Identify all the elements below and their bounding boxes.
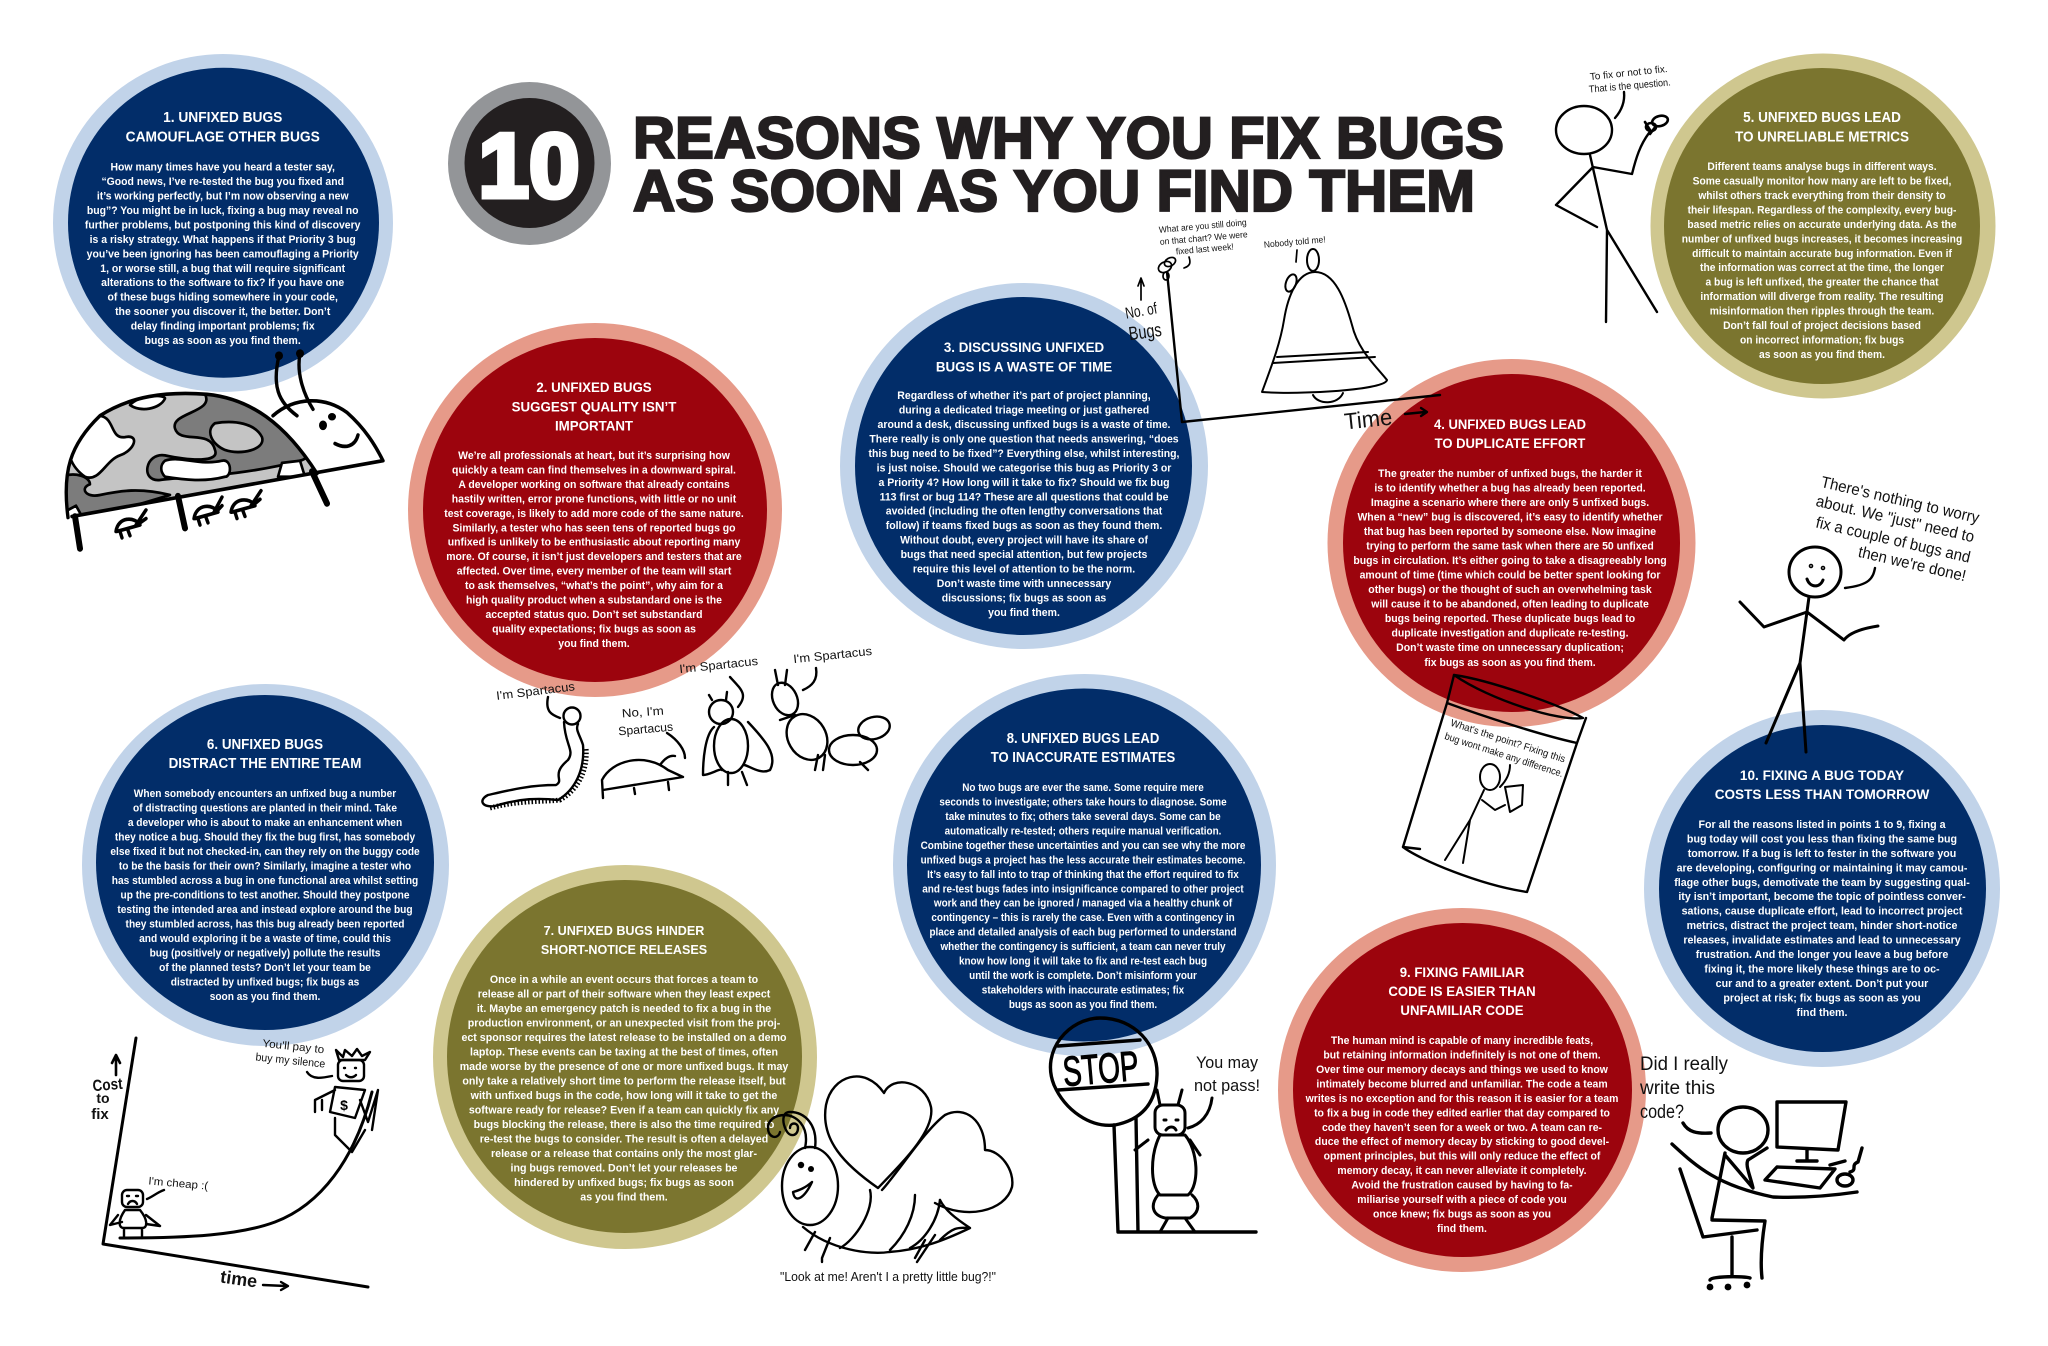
text 1: further problems, but postponing this kind of discovery [85, 219, 360, 232]
axis label: Cost to fix: fix [91, 1106, 109, 1123]
text 2: you find them. [558, 638, 630, 650]
axis label: time: time [219, 1267, 259, 1292]
text 7: Once in a while an event occurs that forces a team to [490, 974, 759, 986]
panel 3: waste of time [840, 283, 1208, 649]
text 2: test coverage, is likely to add more code of the same nature. [444, 508, 744, 520]
heading 6: 6. UNFIXED BUGS [207, 736, 323, 752]
icon: small stick figure with jar [1445, 764, 1523, 863]
caption: I'm Spartacus 2: I'm Spartacus [679, 654, 759, 676]
illustration: camouflage bug [60, 349, 383, 549]
text 8: know how long it will take to fix and re-test each bug [959, 956, 1207, 968]
illustration: stop sign bug: not pass! [1194, 1076, 1260, 1095]
text 5: Different teams analyse bugs in different ways. [1707, 161, 1937, 173]
heading 7: 7. UNFIXED BUGS HINDER [544, 923, 704, 938]
text 4: that bug has been reported by someone else. Now imagine [1364, 526, 1656, 538]
text 3: avoided (including the often lengthy conversations that [886, 506, 1163, 518]
text 9: once knew; fix bugs as soon as you [1373, 1208, 1551, 1221]
text 10: project at risk; fix bugs as soon as you [1723, 992, 1921, 1004]
caption: No, I'm Spartacus: No, I'm [621, 704, 664, 720]
panel 7: short-notice releases [433, 865, 817, 1249]
text 9: duce the effect of memory decay by sticking to good devel- [1315, 1136, 1609, 1148]
text 2: We’re all professionals at heart, but it’s surprising how [458, 450, 730, 462]
panel 1: camouflage [53, 54, 393, 392]
text 1: of these bugs hiding somewhere in your code, [108, 291, 338, 304]
panel 8: inaccurate estimates [893, 674, 1276, 1056]
caption: I'm cheap: I'm cheap :( [148, 1175, 209, 1193]
icon: caterpillar [482, 697, 586, 808]
text 4: bugs in circulation. It’s either going to take a disagreeably long [1353, 555, 1667, 567]
text 7: ect sponsor requires the latest release to be installed on a demo [461, 1032, 787, 1044]
illustration: pretty bee [768, 1076, 1012, 1284]
text 8: until the work is complete. Don’t misinform your [969, 971, 1197, 982]
text 5: whilst others track everything from their density to [1697, 190, 1946, 202]
text 10: fixing it, the more likely these things are to oc- [1704, 963, 1940, 976]
text 5: misinformation then ripples through the team. [1710, 305, 1934, 318]
text 3: 113 first or bug 114? These are all questions that could be [880, 491, 1168, 503]
speech: chart fly: What are you still doing [1158, 217, 1247, 235]
text 10: tomorrow. If a bug is left to fester in the software you [1688, 848, 1956, 860]
heading 3: BUGS IS A WASTE OF TIME [936, 359, 1112, 374]
text 10: metrics, distract the project team, hinder short-notice [1687, 920, 1957, 932]
text 9: memory decay, it can never alleviate it completely. [1337, 1165, 1587, 1177]
heading [633, 106, 1504, 224]
text 7: ing bugs removed. Don’t let your releases be [511, 1162, 737, 1175]
heading 7: SHORT-NOTICE RELEASES [541, 942, 708, 957]
text 9: to fix a bug in code they edited earlier that day compared to [1314, 1107, 1610, 1119]
caption: did I really write this code: Did I really [1640, 1054, 1728, 1075]
text 1: “Good news, I’ve re-tested the bug you fixed and [101, 176, 344, 188]
caption: I'm Spartacus 3: I'm Spartacus [793, 644, 873, 666]
text 4: other bugs) or the thought of such an overwhelming task [1368, 584, 1652, 596]
text 1: bug”? You might be in luck, fixing a bug may reveal no [87, 205, 359, 217]
caption: pay to buy my silence: You'll pay to [262, 1038, 325, 1056]
text 3: you find them. [988, 607, 1060, 619]
illustration: man in jar: bug wont make any difference. [1443, 731, 1564, 780]
heading 4: TO DUPLICATE EFFORT [1435, 436, 1586, 451]
illustration: Spartacus bugs: Spartacus [618, 720, 674, 738]
heading 10: 10. FIXING A BUG TODAY [1740, 768, 1904, 783]
text 8: place and detailed analysis of each bug performed to understand [929, 927, 1237, 939]
speech: nothing to worry: fix a couple of bugs and [1814, 515, 1972, 567]
illustration: Spartacus bugs [482, 644, 892, 808]
text 6: bug (positively or negatively) pollute the results [150, 947, 381, 960]
text 6: of distracting questions are planted in their mind. Take [133, 802, 397, 815]
text 8: Combine together these uncertainties and you can see why the more [921, 840, 1246, 852]
text 8: take minutes to fix; others take several days. Some can be [945, 812, 1221, 823]
heading: AS SOON AS YOU FIND THEM [633, 159, 1475, 224]
heading 8: TO INACCURATE ESTIMATES [991, 748, 1175, 765]
text 8: whether the contingency is sufficient, a team can never truly [940, 942, 1226, 953]
text 5: their lifespan. Regardless of the complexity, every bug- [1688, 204, 1957, 216]
speech: to fix or not [1588, 64, 1671, 118]
text 10: releases, invalidate estimates and lead to unnecessary [1683, 934, 1961, 947]
text 7: with unfixed bugs in the code, how long will it take to get the [470, 1090, 777, 1102]
illustration: stick man on panel 10 [1740, 474, 1981, 752]
text 3: during a dedicated triage meeting or just gathered [899, 404, 1149, 417]
text 3: is just noise. Should we categorise this bug as Priority 3 or [877, 462, 1172, 474]
text 6: soon as you find them. [210, 991, 320, 1003]
badge: number 10 [448, 82, 611, 245]
text 8: stakeholders with inaccurate estimates; fix [982, 985, 1184, 997]
text 7: production environment, or an unexpected visit from the proj- [468, 1017, 781, 1030]
text 3: discussions; fix bugs as soon as [942, 592, 1106, 605]
text 10: For all the reasons listed in points 1 to 9, fixing a [1698, 819, 1946, 831]
text 6: up the pre-conditions to test another. Should they postpone [121, 889, 410, 902]
panel 9: familiar code [1278, 908, 1646, 1272]
text 6: else fixed it but not checked-in, can they rely on the buggy code [110, 846, 420, 858]
text 2: accepted status quo. Don’t set substandard [485, 609, 703, 621]
illustration: cost to fix chart [91, 1038, 378, 1292]
axis label: Time [1343, 404, 1427, 434]
illustration: man in jar [1403, 675, 1586, 892]
text 9: code they haven’t seen for a week or two. A team can re- [1322, 1122, 1602, 1134]
text 7: software ready for release? Even if a team can quickly fix any [469, 1104, 779, 1117]
text 3: Regardless of whether it’s part of project planning, [897, 390, 1151, 402]
text 2: unfixed is unlikely to be enthusiastic about reporting many [448, 537, 740, 549]
text 4: fix bugs as soon as you find them. [1424, 657, 1596, 669]
text 2: quality expectations; fix bugs as soon as [492, 623, 696, 636]
axis label: Cost to fix: Cost [92, 1076, 124, 1095]
heading 2: 2. UNFIXED BUGS [536, 380, 652, 395]
text 9: find them. [1437, 1223, 1487, 1235]
text 7: re-test the bugs to consider. The result is often a delayed [480, 1133, 768, 1146]
heading 9: UNFAMILIAR CODE [1400, 1003, 1524, 1018]
heading 3: 3. DISCUSSING UNFIXED [944, 340, 1104, 355]
icon: seated figure [1672, 1107, 1857, 1280]
speech: nothing to worry [1814, 474, 1981, 588]
icon: smiling stick figure [1740, 547, 1878, 752]
text 9: miliarise yourself with a piece of code you [1357, 1194, 1567, 1206]
text 6: distracted by unfixed bugs; fix bugs as [171, 976, 359, 989]
icon: bee [768, 1076, 1012, 1262]
illustration: coder at desk [1639, 1054, 1862, 1290]
text 6: of the planned tests? Don’t let your team be [159, 962, 371, 974]
text 8: contingency – this is rarely the case. Even with a contingency in [931, 913, 1235, 924]
speech: nobody told me: Nobody told me! [1263, 234, 1326, 250]
heading 5: TO UNRELIABLE METRICS [1735, 128, 1909, 145]
text 6: to be the basis for their own? Similarly, imagine a tester who [119, 860, 412, 873]
text 1: How many times have you heard a tester say, [111, 161, 335, 174]
text 10: ity isn’t important, become the topic of pointless conver- [1678, 891, 1966, 903]
text 2: more. Of course, it isn’t just developers and testers that are [446, 551, 742, 563]
text 3: bugs that need special attention, but few projects [901, 549, 1147, 561]
axis label: No. of Bugs [1124, 278, 1163, 345]
text 9: Over time our memory decays and things we used to know [1316, 1064, 1609, 1076]
text 1: the sooner you discover it, the better. Don’t [115, 306, 331, 318]
text 4: The greater the number of unfixed bugs, the harder it [1378, 468, 1642, 480]
badge: number 10: 10 [478, 116, 580, 217]
text 10: cur and to a greater extent. Don’t put your [1716, 978, 1929, 990]
caption: look at me: "Look at me! Aren't I a pretty little bug?!" [780, 1269, 996, 1284]
text 2: to ask themselves, “what’s the point”, why aim for a [465, 580, 724, 592]
panel 6: distract team [82, 684, 449, 1046]
chart axes [1167, 272, 1440, 422]
illustration: stick man with fly [1556, 64, 1671, 322]
text 7: hindered by unfixed bugs; fix bugs as soon [514, 1177, 734, 1189]
icon: stick figure [1556, 106, 1657, 322]
caption: did I really write this code: code? [1640, 1102, 1684, 1123]
text 4: will cause it to be abandoned, often leading to duplicate [1370, 598, 1649, 611]
icon: bell [1262, 249, 1387, 402]
text 3: follow) if teams fixed bugs as soon as they found them. [886, 520, 1162, 532]
heading 10: COSTS LESS THAN TOMORROW [1715, 787, 1929, 802]
text 10: sations, cause duplicate effort, lead to incorrect project [1682, 906, 1963, 918]
icon: guard bug [1135, 1090, 1212, 1232]
text 7: it. Maybe an emergency patch is needed to fix a bug in the [477, 1003, 771, 1015]
text 8: unfixed bugs a project has the less accurate their estimates become. [921, 855, 1245, 866]
text 4: amount of time (time which could be better spent looking for [1360, 569, 1661, 582]
icon: computer [1765, 1102, 1862, 1188]
text 10: are developing, configuring or maintaining it may camou- [1677, 862, 1968, 874]
axis label: Cost to fix: to [96, 1090, 110, 1106]
icon: dollar sign: $ [340, 1097, 348, 1113]
text 6: When somebody encounters an unfixed bug a number [134, 788, 396, 800]
illustration: bug chart and bell [1124, 217, 1440, 434]
text 1: delay finding important problems; fix [131, 320, 315, 333]
heading 1: 1. UNFIXED BUGS [163, 109, 282, 125]
panel 2: quality [408, 323, 782, 697]
heading 4: 4. UNFIXED BUGS LEAD [1434, 417, 1586, 432]
text 5: a bug is left unfixed, the greater the chance that [1705, 276, 1939, 289]
heading: REASONS WHY YOU FIX BUGS [633, 106, 1504, 171]
speech: nothing to worry: then we're done! [1857, 544, 1968, 585]
text 10: flage other bugs, demotivate the team by suggesting qual- [1674, 877, 1970, 889]
text 2: A developer working on software that already contains [458, 479, 730, 491]
title block [448, 82, 1504, 245]
caption: jar speech: What's the point? Fixing this [1449, 718, 1567, 765]
heading 6: DISTRACT THE ENTIRE TEAM [169, 755, 361, 771]
text 6: and would exploring it be a waste of time, could this [139, 933, 391, 945]
caption: you may not pass: You may [1196, 1053, 1258, 1072]
text 1: 1, or worse still, a bug that will require significant [100, 263, 346, 275]
text 3: Without doubt, every project will have its share of [900, 534, 1148, 547]
icon: cheap bug [110, 1190, 164, 1238]
icon: ant [767, 668, 892, 770]
text 8: It’s easy to fall into to trap of thinking that the effort required to fix [927, 869, 1239, 881]
text 6: a developer who is about to make an enhancement when [128, 817, 402, 829]
panel 10: costs less [1644, 710, 2000, 1067]
text 8: work and they can be ignored / managed via a healthy chunk of [933, 898, 1233, 910]
icon: jar [1403, 675, 1586, 892]
speech: nothing to worry: about. We "just" need to [1814, 493, 1976, 546]
text 6: they notice a bug. Should they fix the bug first, has somebody [115, 831, 415, 844]
text 7: release all or part of their software when they least expect [478, 988, 771, 1001]
text 3: this bug need to be fixed”? Everything else, whilst interesting, [869, 448, 1179, 460]
text 2: hastily written, error prone functions, with little or no unit [452, 493, 737, 505]
text 5: on incorrect information; fix bugs [1740, 334, 1904, 347]
text 9: opment principles, but this will only reduce the effect of [1324, 1150, 1601, 1163]
heading 2: IMPORTANT [555, 418, 634, 434]
text 4: Imagine a scenario where there are only 5 unfixed bugs. [1371, 497, 1649, 509]
illustration: cost to fix chart: buy my silence [255, 1051, 326, 1071]
heading 2: SUGGEST QUALITY ISN’T [512, 399, 677, 414]
text 7: laptop. These events can be taxing at the best of times, often [470, 1046, 778, 1059]
speech: nobody told me [1263, 234, 1326, 262]
text 3: require this level of attention to be the norm. [913, 563, 1135, 576]
icon: stop sign: STOP [1061, 1042, 1141, 1095]
text 7: as you find them. [580, 1191, 668, 1204]
panel 4: duplicate effort [1328, 359, 1696, 727]
text 9: but retaining information indefinitely is not one of them. [1323, 1049, 1601, 1062]
text 9: Avoid the frustration caused by having to fa- [1351, 1179, 1573, 1192]
speech: to fix or not: That is the question. [1588, 77, 1671, 96]
panel 5: unreliable metrics [1650, 54, 1996, 398]
text 8: automatically re-tested; others require manual verification. [945, 826, 1221, 838]
text 9: writes is no exception and for this reason it is easier for a team [1305, 1093, 1618, 1105]
heading 1: CAMOUFLAGE OTHER BUGS [126, 128, 320, 144]
text 3: Don’t waste time with unnecessary [937, 578, 1111, 590]
text 8: and re-test bugs fades into insignificance compared to other project [922, 884, 1244, 895]
speech: to fix or not: To fix or not to fix. [1589, 64, 1668, 83]
text 5: as soon as you find them. [1759, 349, 1885, 361]
icon: fly [703, 677, 772, 785]
text 1: bugs as soon as you find them. [145, 335, 301, 347]
text 6: has stumbled across a bug in one functional area whilst setting [112, 875, 418, 887]
text 5: number of unfixed bugs increases, it becomes increasing [1682, 233, 1962, 245]
text 2: Similarly, a tester who has seen tens of reported bugs go [452, 522, 736, 534]
text 8: No two bugs are ever the same. Some require mere [962, 783, 1204, 794]
text 4: is to identify whether a bug has already been reported. [1374, 482, 1646, 495]
text 3: around a desk, discussing unfixed bugs is a waste of time. [878, 419, 1170, 431]
axis label: Time: Time [1343, 404, 1393, 434]
text 1: alterations to the software to fix? If you have one [101, 277, 344, 289]
text 8: seconds to investigate; others take hours to diagnose. Some [939, 797, 1227, 809]
text 5: based metric relies on accurate underlying data. As the [1687, 219, 1957, 231]
text 4: bugs being reported. These duplicate bugs lead to [1385, 613, 1636, 625]
speech: chart fly [1158, 217, 1248, 268]
text 2: affected. Over time, every member of the team will start [457, 565, 732, 578]
text 10: frustration. And the longer you leave a bug before [1696, 949, 1948, 961]
text 7: only take a relatively short time to perform the release itself, but [462, 1075, 786, 1088]
text 7: bugs blocking the release, there is also the time required to [474, 1119, 775, 1131]
heading 8: 8. UNFIXED BUGS LEAD [1007, 729, 1159, 746]
icon: beetle [602, 733, 685, 798]
heading 9: 9. FIXING FAMILIAR [1400, 965, 1525, 980]
text 10: bug today will cost you less than fixing the same bug [1687, 833, 1957, 845]
text 1: is a risky strategy. What happens if that Priority 3 bug [90, 234, 356, 246]
text 2: high quality product when a substandard one is the [466, 594, 722, 607]
axis label: No. of Bugs: No. of [1124, 300, 1159, 323]
caption: I'm Spartacus 1: I'm Spartacus [495, 679, 576, 703]
axis label: time [219, 1267, 288, 1292]
text 1: you’ve been ignoring has been camouflaging a Priority [87, 248, 359, 260]
heading 5: 5. UNFIXED BUGS LEAD [1743, 109, 1901, 125]
text 5: Some casually monitor how many are left to be fixed, [1693, 175, 1951, 188]
chart axes and curve [103, 1038, 368, 1287]
text 5: difficult to maintain accurate bug information. Even if [1692, 247, 1952, 260]
text 8: bugs as soon as you find them. [1009, 1000, 1157, 1011]
icon: fly held [1645, 114, 1669, 134]
text 4: Don’t waste time on unnecessary duplication; [1396, 642, 1624, 654]
caption: did I really write this code: write this [1639, 1078, 1715, 1099]
heading 9: CODE IS EASIER THAN [1388, 984, 1536, 999]
text 4: When a “new” bug is discovered, it’s easy to identify whether [1357, 511, 1663, 524]
illustration: stop sign bug [1050, 1018, 1260, 1232]
text 4: duplicate investigation and duplicate re-testing. [1392, 627, 1628, 640]
axis label: Cost to fix [91, 1055, 124, 1123]
text 9: The human mind is capable of many incredible feats, [1331, 1035, 1593, 1047]
text 9: intimately become blurred and unfamiliar. The code a team [1316, 1078, 1608, 1090]
text 2: quickly a team can find themselves in a downward spiral. [452, 464, 736, 477]
icon: chair wheels [1707, 1282, 1750, 1290]
text 7: made worse by the presence of one or more unfixed bugs. It may [460, 1061, 788, 1073]
text 5: the information was correct at the time, the longer [1700, 262, 1944, 274]
text 3: a Priority 4? How long will it take to fix? Should we fix bug [878, 477, 1170, 489]
speech: nothing to worry: There's nothing to worry [1819, 474, 1981, 527]
icon: stop sign [1050, 1018, 1256, 1232]
axis label: No. of Bugs: Bugs [1127, 320, 1163, 345]
speech: chart fly: fixed last week! [1175, 242, 1234, 257]
text 7: release or a release that contains only the most glar- [491, 1148, 757, 1160]
text 3: There really is only one question that needs answering, “does [869, 433, 1179, 445]
text 1: it’s working perfectly, but I’m now observing a new [97, 190, 349, 203]
text 5: Don’t fall foul of project decisions based [1723, 320, 1921, 332]
speech: chart fly: on that chart? We were [1159, 229, 1248, 247]
text 4: trying to perform the same task when there are 50 unfixed [1366, 540, 1654, 553]
text 10: find them. [1797, 1007, 1847, 1019]
icon: king bug [307, 1049, 378, 1152]
text 6: testing the intended area and instead explore around the bug [117, 904, 413, 916]
icon: fly on chart [1156, 256, 1177, 280]
text 5: information will diverge from reality. The resulting [1700, 291, 1944, 303]
text 6: they stumbled across, has this bug already been reported [126, 918, 404, 931]
